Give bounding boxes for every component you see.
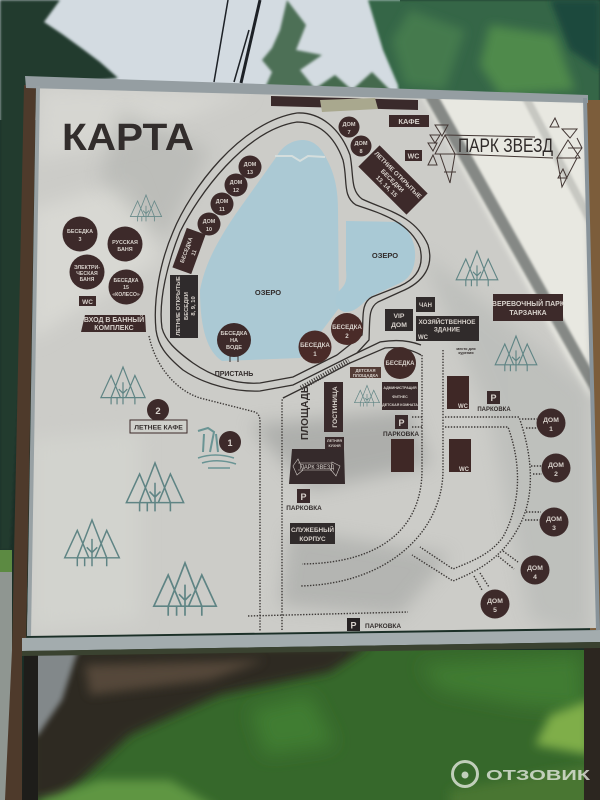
houses 1-5 (480, 408, 570, 618)
marker 2: summer cafe: ЛЕТНЕЕ КАФЕ (134, 424, 183, 432)
utility building: WC (418, 335, 429, 341)
smoking place note (456, 347, 476, 355)
houses 10-13: ДОМ (216, 199, 229, 205)
wc label top (405, 150, 422, 161)
besedka 11 label (172, 228, 206, 274)
hotel building: ГОСТИНИЦА (332, 386, 339, 428)
houses 1-5: ДОМ (548, 462, 564, 469)
houses 1-5: 4 (533, 574, 537, 581)
houses 1-5: 2 (554, 471, 558, 478)
lake: east (335, 221, 415, 312)
houses 10-13: 10 (206, 227, 212, 233)
square label: ПЛОЩАДЬ (300, 386, 311, 440)
rope park label: ВЕРЕВОЧНЫЙ ПАРК (492, 299, 565, 308)
pier label: ПРИСТАНЬ (215, 371, 253, 378)
service building: КОРПУС (299, 536, 326, 543)
besedka on water: БЕСЕДКА (221, 331, 247, 337)
besedka 11 label: БЕСЕДКА (180, 237, 195, 264)
wc label top: WC (408, 154, 419, 160)
hotel building (324, 382, 343, 432)
watermark: otzovik: ОТЗОВИК (486, 767, 591, 784)
administration building (382, 382, 418, 410)
parking top right: ПАРКОВКА (477, 407, 511, 413)
summer gazebos 8,9,10 (170, 275, 198, 338)
tree icons (65, 195, 537, 616)
besedka 1 and 2: БЕСЕДКА (332, 324, 362, 331)
administration building: АДМИНИСТРАЦИЯ (383, 386, 417, 390)
building with wc (449, 439, 471, 473)
bottom parking (347, 618, 401, 631)
houses 10-13: 12 (233, 188, 239, 194)
baths group: ЧЕСКАЯ (76, 271, 98, 277)
besedka: БЕСЕДКА (386, 361, 415, 367)
houses 7-8: 8 (359, 149, 363, 155)
houses 1-5: 1 (549, 426, 553, 433)
lake: main: ОЗЕРО (255, 288, 281, 297)
top brown strip with tape (271, 96, 418, 112)
houses 7-8: 7 (347, 130, 351, 136)
houses 1-5: ДОМ (527, 565, 543, 572)
parking label center: ПАРКОВКА (383, 431, 419, 438)
vip house (385, 309, 413, 331)
rope park label (492, 294, 565, 321)
bottom parking: ПАРКОВКА (365, 623, 401, 630)
watermark: otzovik (452, 762, 591, 786)
administration building: ФИТНЕС (392, 395, 408, 399)
houses 10-13 (198, 156, 262, 236)
playground label (350, 367, 381, 378)
rope park label: ТАРЗАНКА (509, 310, 547, 317)
houses 1-5: ДОМ (487, 598, 503, 605)
marker 1: waterfall (198, 428, 241, 468)
service building (290, 523, 335, 544)
houses 10-13: ДОМ (230, 180, 243, 186)
summer gazebos 8,9,10: ЛЕТНИЕ ОТКРЫТЫЕ (176, 276, 182, 336)
cafe label: КАФЕ (398, 117, 420, 126)
besedka 1 and 2: 1 (313, 351, 317, 358)
baths group: WC (82, 299, 93, 306)
summer kitchen: ЛЕТНЯЯ (327, 439, 342, 443)
besedka 1 and 2: 2 (345, 333, 349, 340)
baths group: КОМПЛЕКС (94, 325, 134, 332)
houses 1-5: 5 (493, 607, 497, 614)
besedka 1 and 2: БЕСЕДКА (300, 342, 330, 349)
baths group: БЕСЕДКА (67, 229, 93, 235)
besedka 1 and 2 (298, 313, 363, 364)
main building with logo: ПАРК ЗВЕЗД (300, 465, 334, 471)
vip house: ДОМ (391, 322, 407, 329)
main building with logo (289, 449, 345, 484)
houses 7-8: ДОМ (342, 122, 356, 128)
title: КАРТА (62, 117, 194, 159)
lake: main (200, 140, 339, 361)
lake: east: ОЗЕРО (372, 251, 398, 260)
parking P center: P (398, 418, 405, 428)
building center (391, 439, 414, 472)
besedka 11 label: 11 (191, 249, 198, 257)
houses 10-13: 11 (219, 207, 225, 213)
parking top right: P (490, 393, 497, 403)
service building: СЛУЖЕБНЫЙ (291, 525, 334, 534)
baths group: РУССКАЯ (112, 240, 138, 246)
summer gazebos 13,14,15: БЕСЕДКИ (379, 168, 405, 194)
houses 7-8: ДОМ (354, 141, 368, 147)
playground label: ПЛОЩАДКА (353, 373, 378, 378)
baths group: БАНЯ (117, 247, 133, 253)
summer kitchen: КУХНЯ (328, 444, 341, 448)
building with wc top right (447, 376, 469, 410)
summer gazebos 13,14,15: 13, 14, 15 (374, 175, 399, 199)
dotted paths (149, 336, 542, 632)
besedka on water: НА (230, 338, 238, 344)
administration building: ДЕТСКАЯ КОМНАТА (382, 403, 418, 407)
baths group: БЕСЕДКА (113, 278, 139, 284)
houses 10-13: ДОМ (244, 162, 257, 168)
smoking place note: место для (456, 347, 476, 351)
cafe label (389, 115, 429, 127)
besedka on water (217, 323, 251, 362)
houses 1-5: ДОМ (543, 417, 559, 424)
marker 2: summer cafe: 2 (155, 406, 161, 417)
marker 1: waterfall: 1 (227, 438, 233, 448)
marker 2: summer cafe (130, 399, 187, 433)
summer gazebos 13,14,15 (358, 145, 428, 215)
utility building: ХОЗЯЙСТВЕННОЕ (419, 317, 475, 326)
logo: park zvezd (428, 118, 582, 187)
board panel (27, 88, 600, 640)
vip house: VIP (394, 313, 405, 320)
summer gazebos 13,14,15: ЛЕТНИЕ ОТКРЫТЫЕ (373, 150, 423, 200)
board frame (22, 76, 600, 656)
houses 7-8 (338, 116, 372, 156)
baths group (62, 216, 146, 332)
parking left (286, 489, 322, 512)
baths group: 15 (123, 285, 129, 291)
baths group: ВХОД В БАННЫЙ (84, 315, 144, 324)
baths group: «КОЛЕСО» (112, 292, 140, 298)
baths group: 3 (78, 237, 82, 243)
chan label (416, 297, 435, 312)
besedka (384, 347, 416, 379)
parking top right (477, 391, 511, 413)
summer gazebos 8,9,10: 8, 9, 10 (191, 296, 197, 316)
parking left: P (300, 492, 307, 502)
besedka on water: ВОДЕ (226, 345, 242, 351)
houses 1-5: 3 (552, 525, 556, 532)
summer kitchen (325, 437, 344, 449)
parking P center (395, 415, 408, 429)
utility building (416, 316, 479, 341)
ring road (155, 113, 430, 398)
playground label: ДЕТСКАЯ (356, 368, 375, 373)
baths group: ЭЛЕКТРИ- (74, 265, 100, 271)
building with wc top right: WC (458, 404, 469, 410)
houses 10-13: ДОМ (203, 219, 216, 225)
bottom parking: P (350, 620, 357, 630)
building with wc: WC (459, 467, 470, 473)
logo: park zvezd: ПАРК ЗВЕЗД (458, 136, 553, 157)
baths group: БАНЯ (80, 277, 95, 283)
summer gazebos 8,9,10: БЕСЕДКИ (184, 292, 190, 320)
houses 10-13: 13 (247, 170, 253, 176)
chan label: ЧАН (419, 303, 432, 309)
smoking place note: курения (458, 351, 474, 355)
utility building: ЗДАНИЕ (434, 326, 460, 334)
parking left: ПАРКОВКА (286, 505, 322, 512)
houses 1-5: ДОМ (546, 516, 562, 523)
